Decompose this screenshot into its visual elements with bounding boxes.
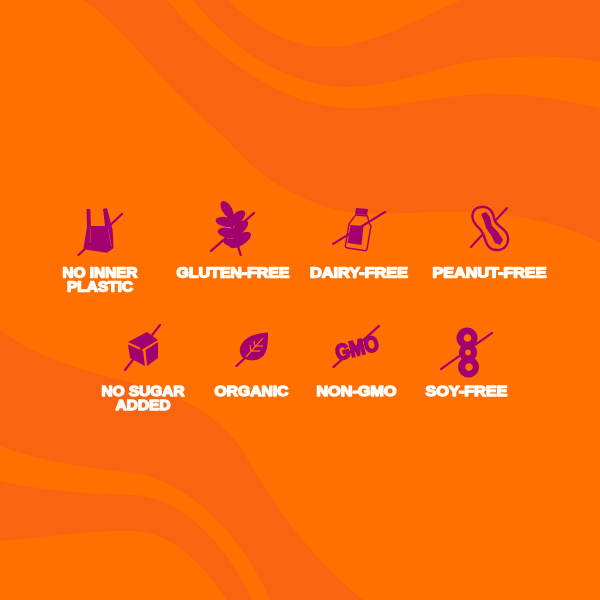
icon: soy free bbox=[441, 328, 492, 378]
label: peanut free: PEANUT-FREE bbox=[432, 266, 547, 282]
label: gluten free: GLUTEN-FREE bbox=[176, 266, 290, 282]
icon: non gmo: GMO bbox=[333, 331, 381, 365]
label: no sugar added: ADDED bbox=[116, 398, 170, 414]
label: dairy free: DAIRY-FREE bbox=[310, 266, 408, 282]
top wave band bbox=[83, 0, 600, 242]
icon: peanut free bbox=[471, 207, 508, 250]
label: non gmo: NON-GMO bbox=[316, 384, 396, 400]
icon: no sugar cube bbox=[125, 325, 160, 370]
label: no inner plastic bbox=[62, 266, 138, 296]
label: no inner plastic: NO INNER bbox=[62, 266, 138, 282]
label: no sugar added: NO SUGAR bbox=[102, 384, 185, 400]
label: organic: ORGANIC bbox=[214, 384, 289, 400]
icon: gluten free wheat bbox=[211, 199, 254, 255]
label: no sugar added bbox=[102, 384, 185, 414]
icon: organic leaf bbox=[236, 332, 268, 366]
icon: dairy free bottle bbox=[333, 208, 385, 251]
label: soy free: SOY-FREE bbox=[426, 384, 508, 400]
icon: no plastic bag bbox=[78, 208, 122, 255]
label: no inner plastic: PLASTIC bbox=[67, 280, 134, 296]
bottom wave band bbox=[0, 330, 363, 600]
